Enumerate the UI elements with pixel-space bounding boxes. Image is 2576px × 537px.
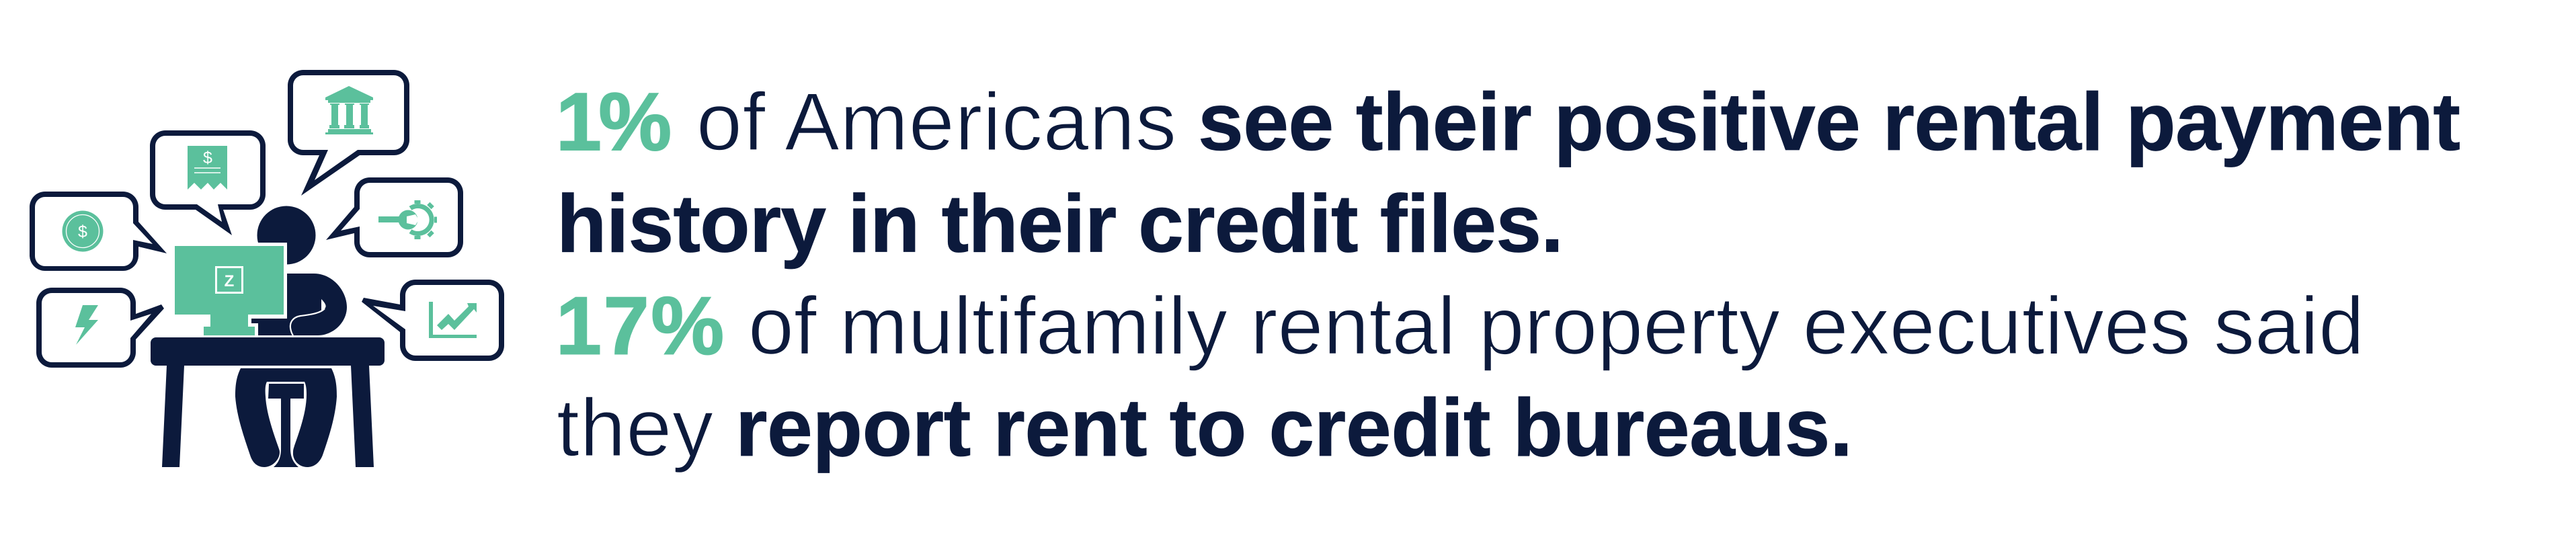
stool xyxy=(268,384,304,467)
person: head xyxy=(257,206,316,265)
line 4: report rent to credit bureaus. xyxy=(735,382,1853,473)
speech bubble: growth chart xyxy=(362,280,504,361)
speech bubble: wrench and gear xyxy=(326,177,463,257)
line 1: see their positive rental payment xyxy=(1198,76,2460,167)
monitor logo: Z xyxy=(225,272,234,290)
icon: wrench and gear xyxy=(378,200,437,239)
line 1: 1% xyxy=(556,76,672,167)
icon: bank xyxy=(325,86,373,134)
icon: receipt: $ xyxy=(203,149,212,167)
line 1 xyxy=(556,76,2460,167)
icon: growth chart xyxy=(429,302,477,338)
speech bubble: dollar coin xyxy=(30,192,167,271)
speech bubble: bank xyxy=(288,70,409,196)
speech bubble: lightning bolt xyxy=(36,288,164,368)
monitor xyxy=(175,246,284,335)
line 3: of multifamily rental property executives said xyxy=(748,280,2364,371)
desk xyxy=(151,337,385,467)
monitor logo xyxy=(216,267,242,293)
icon: dollar coin: $ xyxy=(78,222,87,241)
line 4: they xyxy=(557,382,713,473)
line 1: of Americans xyxy=(696,76,1176,167)
person: torso and arm xyxy=(251,274,347,335)
line 2: history in their credit files. xyxy=(557,177,1564,269)
line 3: 17% xyxy=(556,280,724,371)
illustration: person at desk with speech bubbles xyxy=(30,70,504,467)
icon: receipt xyxy=(188,146,227,190)
arm outline xyxy=(290,299,326,335)
speech bubble: receipt xyxy=(150,130,266,235)
statement text xyxy=(556,76,2460,473)
person: legs xyxy=(235,368,337,467)
monitor halo xyxy=(171,243,287,336)
icon: dollar coin xyxy=(62,211,104,251)
icon: lightning bolt xyxy=(75,305,98,345)
